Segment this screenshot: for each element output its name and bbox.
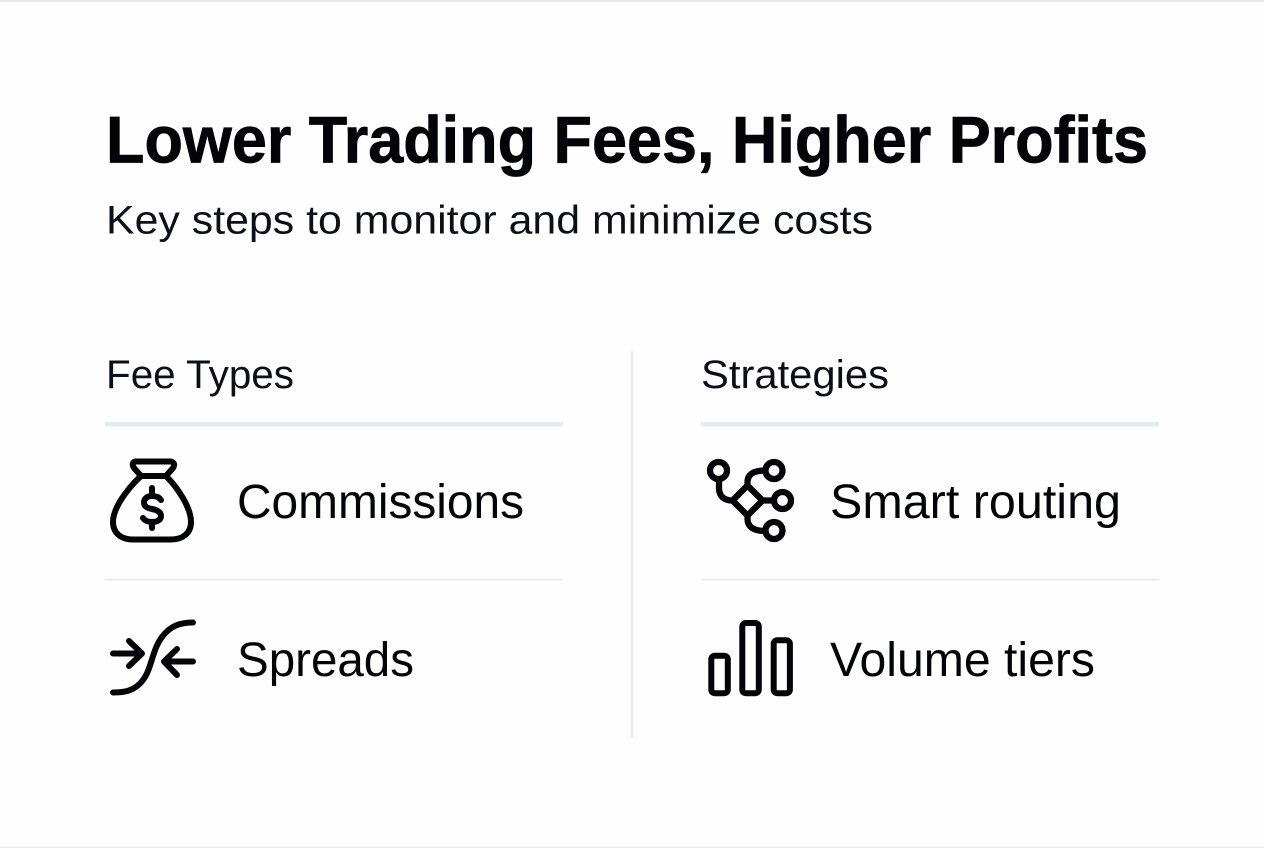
panel: fee types bbox=[105, 353, 563, 692]
label: smart routing: Smart routing bbox=[830, 476, 1121, 529]
heading: fee types: Fee Types bbox=[106, 353, 294, 397]
label: volume tiers: Volume tiers bbox=[830, 634, 1095, 687]
icon: smart routing bbox=[710, 462, 791, 539]
icon: spreads bbox=[113, 622, 193, 692]
icon: money bag bbox=[113, 462, 191, 540]
icon: volume bars bbox=[711, 623, 790, 693]
title: Lower Trading Fees, Higher Profits bbox=[106, 102, 1148, 176]
label: spreads: Spreads bbox=[237, 634, 414, 687]
subtitle: Key steps to monitor and minimize costs bbox=[106, 198, 873, 242]
panel: strategies bbox=[701, 353, 1159, 693]
heading: strategies: Strategies bbox=[701, 353, 889, 397]
label: commissions: Commissions bbox=[237, 476, 524, 529]
